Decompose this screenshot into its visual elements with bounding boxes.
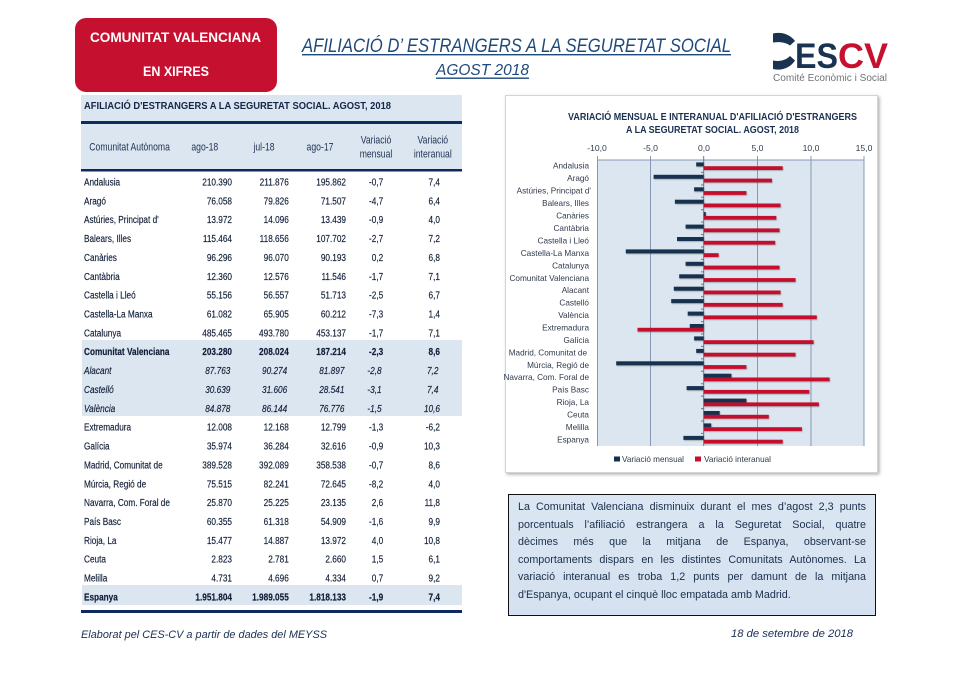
row: Castella i Lleó: 6,7 — [429, 290, 440, 301]
category labels: Navarra, Com. Foral de — [503, 373, 589, 382]
row: Aragó: Aragó — [84, 196, 106, 207]
row: Alacant: 90.274 — [262, 365, 287, 376]
table header: jul-18 — [253, 142, 275, 154]
row: Galícia: 10,3 — [424, 441, 440, 452]
row: País Basc: País Basc — [84, 516, 121, 527]
legend — [614, 454, 771, 464]
row: Castella i Lleó — [84, 290, 440, 301]
x axis labels: 15,0 — [856, 143, 873, 153]
row: Ceuta: 2.781 — [268, 554, 289, 565]
row: Galícia — [84, 441, 440, 452]
x axis labels: 10,0 — [803, 143, 820, 153]
table header: ago-18 — [191, 142, 218, 154]
row: País Basc: 60.355 — [207, 516, 232, 527]
row: Alacant — [83, 365, 439, 376]
row: Extremadura: 12.168 — [264, 422, 289, 433]
row: Comunitat Valenciana: 8,6 — [429, 346, 440, 357]
logo: CES-CV: CV — [838, 37, 889, 76]
row: Múrcia — [84, 478, 440, 490]
row: Castelló: 7,4 — [427, 384, 438, 395]
row: País Basc: 54.909 — [321, 516, 346, 527]
row: Espanya: Espanya — [84, 592, 119, 603]
category labels: Múrcia, Regió de — [527, 361, 589, 370]
row: Castelló: -3,1 — [367, 384, 382, 395]
row: Galícia: -0,9 — [369, 441, 383, 452]
category labels: Alacant — [562, 286, 590, 295]
row: Alacant: 81.897 — [319, 365, 345, 376]
table header: Variació — [361, 135, 392, 147]
row: Ceuta: Ceuta — [84, 554, 107, 565]
panel: data table — [81, 95, 462, 613]
row: Castelló: 28.541 — [318, 384, 344, 395]
row: Melilla — [84, 573, 440, 584]
row: València: València — [84, 403, 115, 414]
logo: CES-CV — [773, 33, 889, 84]
row: Canàries: 96.296 — [207, 252, 232, 263]
series: variació interanual — [638, 166, 830, 443]
row: Astúries: 14.096 — [264, 214, 289, 225]
red badge: Comunitat Valenciana en xifres: COMUNITAT VALENCIANA — [90, 30, 261, 45]
row: Extremadura — [84, 422, 440, 433]
footer: date: 18 de setembre de 2018 — [731, 628, 854, 640]
row: Ceuta: 6,1 — [429, 554, 440, 565]
row: Castella i Lleó: -2,5 — [369, 290, 383, 301]
row: País Basc: 61.318 — [264, 516, 289, 527]
row: Navarra: Navarra, Com. Foral de — [84, 497, 170, 508]
category labels: Astúries, Principat d' — [517, 187, 591, 196]
row: Rioja: 14.887 — [264, 535, 289, 546]
row: Espanya: 1.951.804 — [195, 592, 233, 603]
category labels: Melilla — [566, 423, 589, 432]
row: Comunitat Valenciana: 208.024 — [259, 346, 290, 357]
category labels: Balears, Illes — [542, 199, 589, 208]
category labels: Castella-La Manxa — [521, 249, 589, 258]
row: Cantàbria: 12.576 — [264, 271, 289, 282]
row: Cantàbria: -1,7 — [369, 271, 383, 282]
text block: commentary: comportaments dispars en les distintes Comunitats Autònomes. La — [518, 554, 866, 566]
row: Madrid: 358.538 — [316, 460, 346, 471]
table header: Variació — [418, 135, 449, 147]
row: Canàries — [84, 252, 440, 263]
category labels: Castella i Lleó — [538, 236, 589, 246]
chart title: A LA SEGURETAT SOCIAL. AGOST, 2018 — [626, 125, 799, 136]
row: Rioja: Rioja, La — [84, 535, 117, 546]
row: Aragó — [84, 196, 440, 207]
row: Cantàbria: 7,1 — [429, 271, 440, 282]
row: Madrid: Madrid, Comunitat de — [84, 460, 163, 471]
row: Navarra: 2,6 — [372, 497, 383, 508]
row: Galícia: 36.284 — [264, 441, 289, 452]
category labels: Madrid, Comunitat de — [509, 348, 587, 357]
x axis labels: -10,0 — [587, 143, 607, 153]
row: Balears — [84, 233, 440, 244]
row: Extremadura: Extremadura — [84, 422, 132, 433]
row: Castella i Lleó: 56.557 — [264, 290, 289, 301]
row: València: 10,6 — [424, 403, 441, 414]
row: Canàries: 96.070 — [264, 252, 289, 263]
row: Alacant: -2,8 — [367, 365, 382, 376]
row: País Basc: 9,9 — [429, 516, 440, 527]
row: Melilla: 4.334 — [325, 573, 346, 584]
red badge: Comunitat Valenciana en xifres — [75, 18, 277, 92]
panel: bar chart — [503, 96, 878, 472]
series: variació mensual — [616, 162, 746, 440]
row: Astúries: Astúries, Principat d' — [84, 214, 159, 225]
chart title: VARIACIÓ MENSUAL E INTERANUAL D'AFILIACIÓ D'ESTRANGERS — [568, 110, 857, 123]
row: Canàries: 0,2 — [372, 252, 383, 263]
row: País Basc: -1,6 — [369, 516, 383, 527]
row: Espanya — [84, 592, 441, 603]
row: Aragó: 79.826 — [264, 196, 289, 207]
row: Castella-La Manxa: 61.082 — [207, 309, 232, 320]
row: Andalusia — [84, 177, 440, 188]
row: Navarra: 11,8 — [425, 497, 440, 508]
logo: CES-CV: Comité Econòmic i Social — [773, 73, 887, 84]
row: Balears: 107.702 — [316, 233, 346, 244]
row: Melilla: 4.731 — [211, 573, 232, 584]
category labels: València — [558, 311, 589, 320]
row: Galícia: Galícia — [84, 441, 110, 452]
row: Extremadura: 12.799 — [321, 422, 346, 433]
category labels: Andalusia — [553, 162, 589, 171]
table header: mensual — [360, 149, 392, 161]
legend: Variació interanual — [704, 454, 771, 464]
row: Castelló: 31.606 — [262, 384, 288, 395]
main title — [301, 35, 731, 79]
row: Alacant: 87.763 — [205, 365, 231, 376]
category labels: Galícia — [564, 336, 589, 345]
row: Rioja — [84, 535, 440, 546]
row: Andalusia: -0,7 — [369, 177, 383, 188]
row: Canàries: Canàries — [84, 252, 117, 263]
row: Balears: 118.656 — [260, 233, 289, 244]
row: Castelló — [84, 384, 438, 395]
row: Andalusia: 210.390 — [202, 177, 232, 188]
row: Ceuta: 2.823 — [211, 554, 232, 565]
x axis labels — [587, 143, 873, 153]
table header: interanual — [414, 149, 452, 161]
x axis labels: 0,0 — [698, 143, 710, 153]
category labels: Catalunya — [552, 261, 589, 270]
row: Aragó: 71.507 — [321, 196, 346, 207]
text block: commentary: porcentuals l’afiliació estrangera a la Seguretat Social, quatre — [518, 518, 866, 530]
row: Astúries: 4,0 — [429, 214, 440, 225]
row: Aragó: 6,4 — [429, 196, 440, 207]
row: Castelló: 30.639 — [205, 384, 230, 395]
text block: commentary: dècimes més que la mitjana de Espanya, observant-se — [518, 536, 866, 548]
row: Andalusia: Andalusia — [84, 177, 121, 188]
row: Madrid: 392.089 — [259, 460, 289, 471]
row: València: 76.776 — [319, 403, 345, 414]
row: Astúries — [84, 214, 440, 225]
row: Múrcia: -8,2 — [369, 478, 383, 490]
row: Aragó: 76.058 — [207, 196, 232, 207]
row: Castella-La Manxa: -7,3 — [369, 309, 383, 320]
row: Canàries: 6,8 — [429, 252, 440, 263]
x axis labels: -5,0 — [643, 143, 658, 153]
row: Madrid: -0,7 — [369, 460, 383, 471]
row: Astúries: -0,9 — [369, 214, 383, 225]
row: Comunitat Valenciana: Comunitat Valenciana — [84, 346, 170, 357]
table title band: AFILIACIÓ D'ESTRANGERS A LA SEGURETAT SOCIAL. AGOST, 2018 — [84, 99, 391, 112]
row: Balears: -2,7 — [369, 233, 383, 244]
row: Aragó: -4,7 — [369, 196, 383, 207]
category labels: Espanya — [557, 435, 589, 444]
row: Canàries: 90.193 — [321, 252, 346, 263]
row: Cantàbria: 11.546 — [321, 271, 346, 282]
row: País Basc — [84, 516, 440, 527]
row: Melilla: Melilla — [84, 573, 108, 584]
row: Extremadura: -1,3 — [369, 422, 383, 433]
row: Cantàbria: 12.360 — [207, 271, 232, 282]
text block: commentary: La Comunitat Valenciana disminuix durant el mes d’agost 2,3 punts — [518, 501, 866, 513]
table header: ago-17 — [307, 142, 333, 154]
row: Espanya: 1.818.133 — [309, 592, 346, 603]
row: Rioja: 13.972 — [321, 535, 346, 546]
row: Madrid: 389.528 — [202, 460, 232, 471]
row: Cantàbria: Cantàbria — [84, 271, 120, 282]
row: Espanya: 1.989.055 — [252, 592, 289, 603]
row: Castella i Lleó: Castella i Lleó — [84, 290, 136, 301]
row: Balears: 7,2 — [429, 233, 440, 244]
row: Ceuta — [84, 554, 440, 565]
row: Espanya: -1,9 — [369, 592, 383, 603]
text block: commentary: d'Espanya, ocupant el cinquè lloc empatada amb Madrid. — [518, 588, 791, 600]
row: València: 86.144 — [262, 403, 287, 414]
row: Balears: Balears, Illes — [84, 233, 131, 244]
row: Andalusia: 7,4 — [429, 177, 440, 188]
row: Alacant: 7,2 — [427, 365, 439, 376]
row: Catalunya: -1,7 — [369, 328, 383, 339]
row: Múrcia: 72.645 — [321, 478, 346, 490]
row: Múrcia: 82.241 — [264, 478, 289, 490]
row: Múrcia: Múrcia, Regió de — [84, 478, 146, 490]
row: Castella-La Manxa: 65.905 — [264, 309, 289, 320]
row: València — [84, 403, 441, 414]
row: Navarra: 23.135 — [321, 497, 346, 508]
row: Castella i Lleó: 55.156 — [207, 290, 232, 301]
row: Catalunya: Catalunya — [84, 328, 122, 339]
row: Castella i Lleó: 51.713 — [321, 290, 346, 301]
row: Catalunya: 493.780 — [259, 328, 289, 339]
plot area — [597, 160, 864, 446]
row: Cantàbria — [84, 271, 440, 282]
legend: Variació mensual — [622, 454, 684, 464]
text block: commentary — [508, 494, 876, 616]
row: Catalunya: 485.465 — [202, 328, 232, 339]
row: Madrid: 8,6 — [429, 460, 440, 471]
row: Múrcia: 75.515 — [207, 478, 232, 490]
row: Castella-La Manxa: Castella-La Manxa — [84, 309, 153, 320]
row: València: -1,5 — [367, 403, 382, 414]
category labels: Cantàbria — [553, 224, 589, 233]
row: Castella-La Manxa — [84, 309, 440, 320]
text block: commentary: variació interanual es troba 1,2 punts per damunt de la mitjana — [518, 571, 866, 583]
row: Castella-La Manxa: 60.212 — [321, 309, 346, 320]
table rows — [83, 177, 441, 603]
highlight bands — [82, 340, 462, 605]
row: Astúries: 13.972 — [207, 214, 232, 225]
logo: CES-CV: ES — [795, 37, 838, 76]
row: Rioja: 4,0 — [372, 535, 383, 546]
x axis labels: 5,0 — [752, 143, 764, 153]
row: Castella-La Manxa: 1,4 — [429, 309, 440, 320]
row: Andalusia: 195.862 — [316, 177, 346, 188]
row: Comunitat Valenciana — [84, 346, 440, 357]
row: Galícia: 35.974 — [207, 441, 232, 452]
row: Ceuta: 1,5 — [372, 554, 383, 565]
row: Catalunya: 7,1 — [429, 328, 440, 339]
row: Catalunya — [84, 328, 440, 339]
row: València: 84.878 — [205, 403, 231, 414]
category labels — [503, 162, 591, 444]
row: Melilla: 0,7 — [372, 573, 383, 584]
table header — [81, 121, 462, 172]
category labels: País Basc — [552, 386, 589, 395]
row: Comunitat Valenciana: 187.214 — [316, 346, 347, 357]
footer: source: Elaborat pel CES-CV a partir de dades del MEYSS — [81, 629, 328, 641]
row: Rioja: 10,8 — [424, 535, 440, 546]
main title: AGOST 2018 — [435, 62, 529, 79]
category labels: Castelló — [559, 299, 589, 308]
category labels: Aragó — [567, 174, 589, 183]
table title band — [81, 95, 462, 121]
row: Navarra — [84, 497, 440, 508]
row: Extremadura: -6,2 — [426, 422, 440, 433]
category labels: Canàries — [556, 212, 589, 221]
red badge: Comunitat Valenciana en xifres: EN XIFRES — [143, 64, 209, 79]
chart title — [568, 110, 857, 136]
row: Balears: 115.464 — [203, 233, 232, 244]
row: Catalunya: 453.137 — [316, 328, 346, 339]
category labels: Comunitat Valenciana — [510, 274, 589, 283]
row: Melilla: 9,2 — [429, 573, 440, 584]
row: Melilla: 4.696 — [268, 573, 289, 584]
row: Comunitat Valenciana: -2,3 — [369, 346, 383, 357]
row: Espanya: 7,4 — [429, 592, 441, 603]
row: Comunitat Valenciana: 203.280 — [202, 346, 232, 357]
main title: AFILIACIÓ D’ ESTRANGERS A LA SEGURETAT SOCIAL — [301, 35, 731, 57]
row: Ceuta: 2.660 — [325, 554, 346, 565]
row: Astúries: 13.439 — [321, 214, 346, 225]
category labels: Rioja, La — [557, 398, 589, 407]
row: Alacant: Alacant — [83, 365, 112, 376]
row: Extremadura: 12.008 — [207, 422, 232, 433]
row: Rioja: 15.477 — [207, 535, 232, 546]
row: Navarra: 25.225 — [264, 497, 289, 508]
table header: Comunitat Autònoma — [89, 142, 170, 154]
row: Navarra: 25.870 — [207, 497, 232, 508]
category labels: Ceuta — [567, 410, 589, 420]
row: Andalusia: 211.876 — [260, 177, 289, 188]
category labels: Extremadura — [542, 324, 589, 332]
row: Múrcia: 4,0 — [429, 478, 440, 490]
row: Galícia: 32.616 — [321, 441, 346, 452]
row: Castelló: Castelló — [84, 384, 114, 395]
row: Madrid — [84, 460, 440, 471]
